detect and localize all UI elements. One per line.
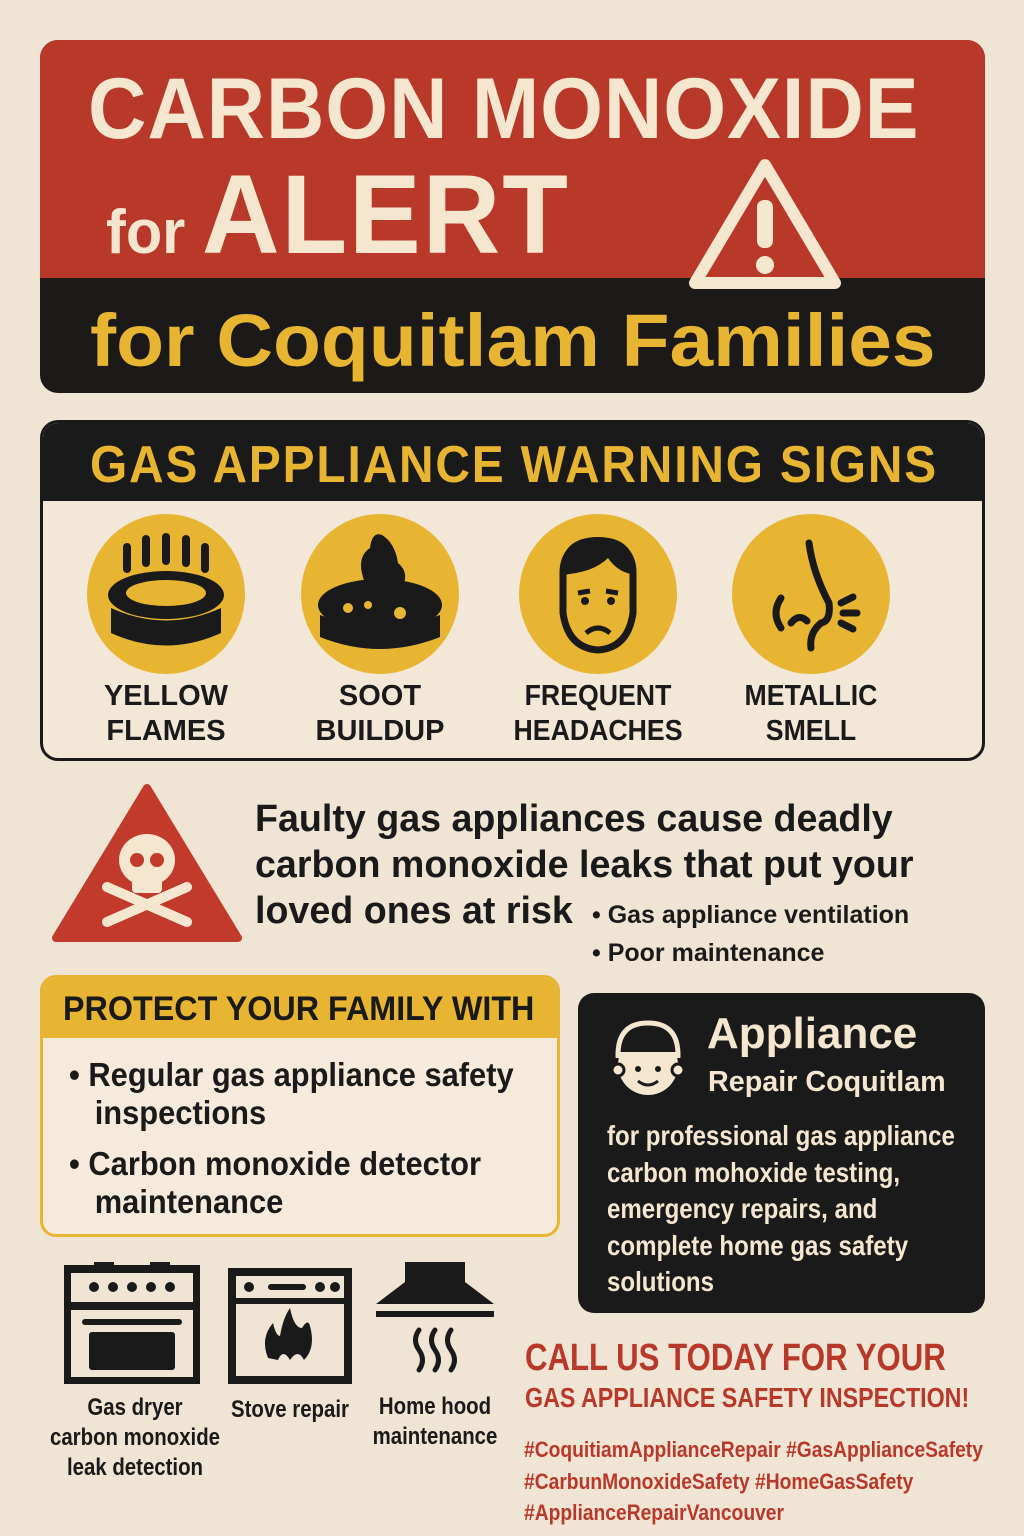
cause bullets: • Gas appliance ventilation [592,901,909,929]
label: metallic smell: SMELL [766,715,856,747]
label: home hood: Home hood [379,1393,491,1420]
bullets: maintenance [95,1183,283,1220]
label: metallic smell [745,680,877,747]
label: home hood [373,1393,497,1450]
panel: warning signs [40,420,985,761]
panel: appliance repair coquitlam [578,993,985,1313]
bullets: inspections [95,1094,266,1131]
cause bullets: • Poor maintenance [592,939,824,967]
icon: warning triangle [689,159,841,289]
bullets: • Regular gas appliance safety [69,1056,514,1093]
service text: complete home gas safety [607,1230,908,1260]
icon: stove [228,1268,352,1384]
label: gas dryer: Gas dryer [87,1394,183,1421]
panel: protect your family: PROTECT YOUR FAMILY WITH [63,990,534,1028]
icon: yellow flames [87,514,245,674]
danger text [255,798,913,932]
hashtags [524,1437,983,1525]
label: headaches: FREQUENT [525,680,671,712]
label: soot [316,680,444,747]
call to action: CALL US TODAY FOR YOUR [525,1337,946,1379]
hashtags: #ApplianceRepairVancouver [524,1500,784,1525]
subtitle: for Coquitlam Families [90,299,936,382]
cause bullets [592,901,909,967]
icon: headache face [519,514,677,674]
label: home hood: maintenance [373,1423,497,1450]
service text: for professional gas appliance [607,1120,955,1151]
label: gas dryer: carbon monoxide [50,1424,220,1451]
label: stove: Stove repair [231,1396,349,1423]
label: headaches [514,680,682,747]
icon: skull triangle [52,784,242,942]
bullets: • Carbon monoxide detector [69,1145,481,1182]
brand name: Appliance [707,1009,917,1058]
call to action [525,1337,969,1413]
danger text: Faulty gas appliances cause deadly [255,798,893,840]
panel: warning signs: GAS APPLIANCE WARNING SIGNS [90,436,938,494]
panel: appliance repair coquitlam: Repair Coquitlam [708,1066,946,1098]
service text: solutions [607,1266,714,1297]
service text: emergency repairs, and [607,1193,877,1224]
service text [607,1120,955,1297]
panel: protect your family [40,975,560,1237]
title line 1: CARBON MONOXIDE [88,61,920,157]
call to action: GAS APPLIANCE SAFETY INSPECTION! [525,1382,969,1413]
label: yellow flames: FLAMES [106,715,226,747]
label: headaches: HEADACHES [514,715,682,747]
icon: nose smell [732,514,890,674]
label: soot: SOOT [339,680,421,712]
heading [43,423,988,501]
label: yellow flames [104,680,228,747]
label: gas dryer: leak detection [67,1454,203,1481]
label: soot: BUILDUP [316,715,444,747]
title line 2: for ALERT [106,152,570,277]
danger text: loved ones at risk [255,890,573,932]
danger text: carbon monoxide leaks that put your [255,844,913,886]
red title band [40,40,985,278]
icon: range hood [376,1262,494,1372]
icon: soot [301,514,459,674]
service text: carbon mohoxide testing, [607,1156,900,1188]
hashtags: #CoquitiamApplianceRepair #GasApplianceSafety [524,1437,983,1462]
label: yellow flames: YELLOW [104,680,228,712]
icon: oven [64,1262,200,1384]
heading [43,978,563,1038]
label: metallic smell: METALLIC [745,680,877,712]
icon: technician [614,1020,682,1095]
hashtags: #CarbunMonoxideSafety #HomeGasSafety [524,1468,913,1494]
header panel [40,40,985,393]
label: gas dryer [50,1394,220,1481]
bullets [69,1056,514,1220]
